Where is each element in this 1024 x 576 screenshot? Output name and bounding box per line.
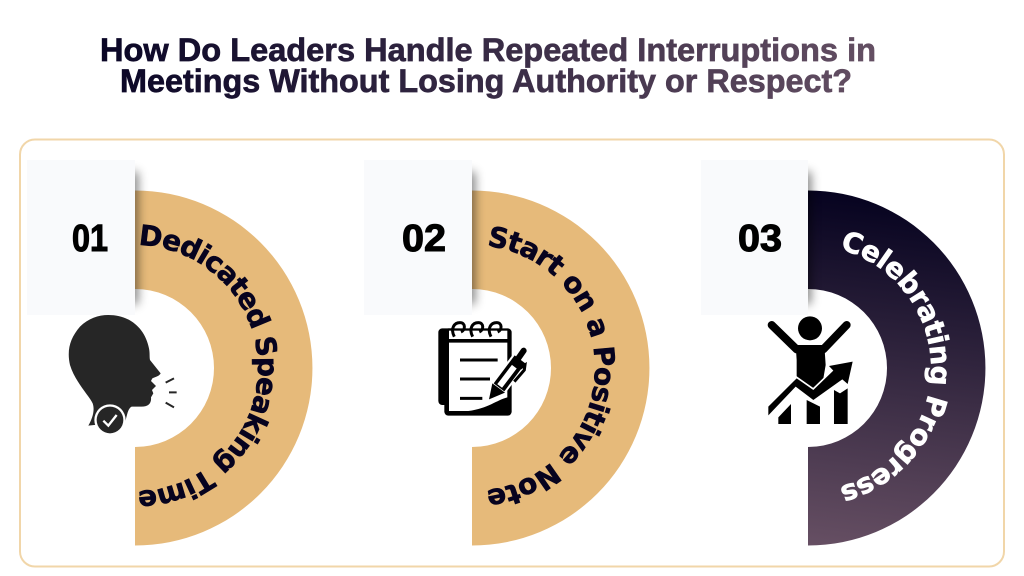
title: Meetings Without Losing Authority or Respect? [120, 63, 852, 99]
panel: step 1 [68, 166, 312, 546]
icon: notepad and pen [438, 323, 525, 416]
panel: step 3 [738, 166, 986, 546]
ring label 3: Celebrating Progress [841, 232, 950, 501]
icon: speaking head with check [69, 315, 177, 436]
number box shadow 1 [127, 172, 138, 304]
number 01: 01 [72, 218, 108, 260]
title: How Do Leaders Handle Repeated Interruptions in [100, 32, 876, 68]
number 03: 03 [738, 218, 782, 260]
number 02: 02 [402, 218, 446, 260]
number box 3 [701, 160, 808, 315]
panel: outer frame [20, 140, 1004, 566]
panel: step 2 [402, 166, 650, 546]
semicircle ring 3 [808, 190, 985, 546]
semicircle ring 2 [472, 190, 649, 546]
title [100, 32, 876, 99]
number box 1 [27, 160, 135, 315]
icon: person celebrating on rising chart [768, 316, 853, 424]
ring label 1: Dedicated Speaking Time [139, 224, 278, 506]
semicircle ring 1 [135, 190, 312, 546]
number box shadow 3 [800, 172, 811, 304]
ring label 2: Start on a Positive Note [488, 226, 616, 505]
number box 2 [364, 160, 472, 315]
number box shadow 2 [464, 172, 475, 304]
